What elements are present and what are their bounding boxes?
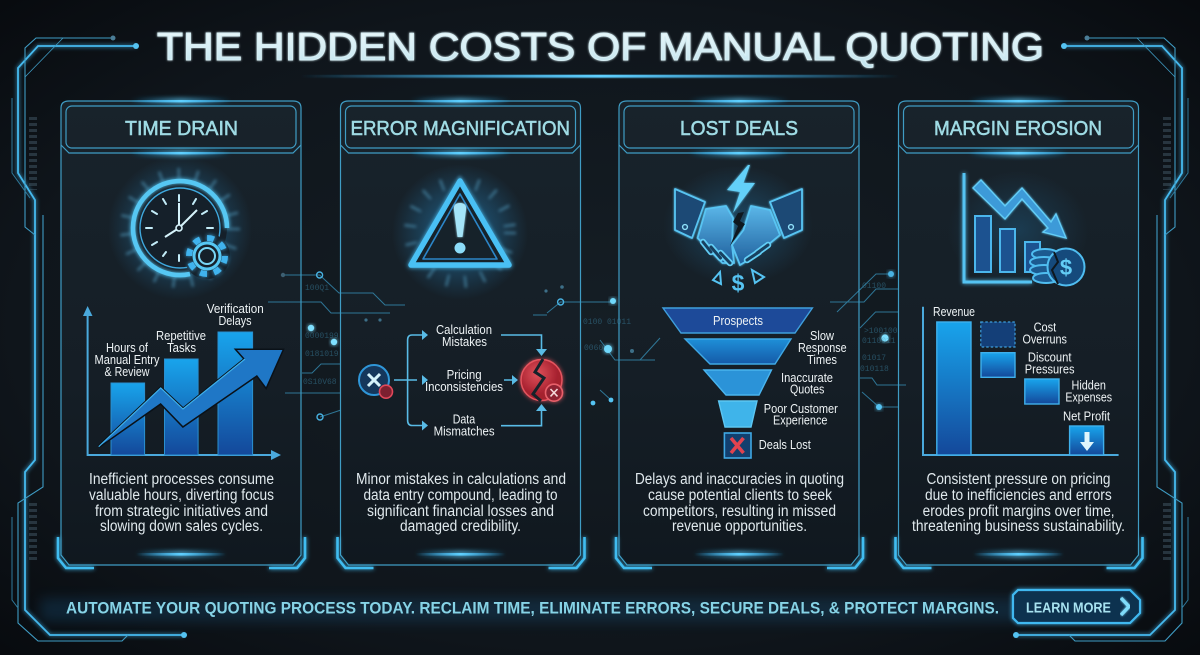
icon: warning triangle [392,164,528,300]
chart labels: Net Profit [1063,409,1110,423]
description [635,471,844,535]
bar chart: rising time cost [83,302,282,460]
description: threatening business sustainability. [912,518,1125,535]
flow labels: Calculation [436,323,492,337]
icon: clock with gear [108,156,252,300]
panel: error magnification [338,100,584,568]
flow labels: Mistakes [442,335,487,349]
funnel labels [713,314,847,452]
panel frame [896,100,1142,568]
circuit connectors: lost deals to margin erosion: 01100 [862,282,886,291]
circuit connectors: time drain to error magnification: 100Q1 [305,284,329,293]
chart labels: Expenses [1065,390,1112,404]
panel: time drain [58,100,305,568]
broken red result icon [521,359,562,401]
icon: broken handshake [663,165,813,296]
heading: MARGIN EROSION [934,118,1102,140]
description: competitors, resulting in missed [643,503,836,520]
funnel labels: Experience [773,414,828,428]
branching arrows [394,330,547,430]
description: Inefficient processes consume [89,471,274,488]
panel frame [338,100,584,568]
funnel labels: Times [807,353,837,367]
description: significant financial losses and [367,503,554,520]
description: damaged credibility. [400,518,521,535]
circuit connectors: lost deals to margin erosion: 0110011 [862,337,896,346]
description: due to inefficiencies and errors [925,487,1112,504]
circuit connectors: error magnification to lost deals [533,285,660,405]
frame: left circuit border [12,36,187,641]
button: learn more: LEARN MORE [1026,600,1111,616]
button: learn more [1013,590,1140,623]
circuit connectors: lost deals to margin erosion [830,271,906,410]
panel frame [58,100,305,568]
frame: right circuit border [1013,36,1188,641]
description: cause potential clients to seek [648,487,832,504]
description [89,471,274,535]
panel: lost deals [616,100,863,568]
chart labels: Revenue [933,305,975,319]
chart labels: & Review [104,365,150,379]
chart labels: Cost [1034,321,1057,335]
waterfall chart: revenue to net profit [923,305,1119,455]
chart labels: Hidden [1072,379,1106,393]
icon: falling chart with coins [948,170,1088,290]
icon: falling chart with coins: $ [1060,255,1072,280]
circuit connectors: time drain to error magnification: 0000199 [305,332,339,341]
chart labels: Delays [218,314,252,328]
circuit connectors: lost deals to margin erosion: 010118 [860,365,889,374]
icon: chevron [1121,598,1129,615]
chart labels [94,302,264,379]
description: slowing down sales cycles. [100,518,263,535]
bottom band glow [40,598,1020,622]
circuit connectors: error magnification to lost deals: 0060 [584,344,603,353]
chart labels: Manual Entry [94,353,160,367]
call to action text: AUTOMATE YOUR QUOTING PROCESS TODAY. RECLAIM TIME, ELIMINATE ERRORS, SECURE DEALS, & PROTECT MARGINS. [66,598,999,618]
circuit connectors: time drain to error magnification [268,272,405,420]
chart labels: Verification [207,302,264,316]
description: Delays and inaccuracies in quoting [635,471,844,488]
chart labels: Tasks [167,341,196,355]
description: data entry compound, leading to [364,487,558,504]
funnel [663,308,847,458]
description: Minor mistakes in calculations and [356,471,566,488]
funnel labels: Inaccurate [781,371,833,385]
funnel labels: Quotes [790,383,824,397]
flow labels: Mismatches [434,425,495,439]
funnel labels: Prospects [713,314,763,328]
chart labels: Overruns [1022,332,1067,346]
funnel labels: Slow [810,329,835,343]
description [912,471,1125,535]
panel frame [616,100,863,568]
description: revenue opportunities. [672,518,807,535]
source error icon [359,365,392,398]
flow labels: Pricing [447,368,482,382]
chart labels: Pressures [1025,362,1074,376]
circuit connectors: lost deals to margin erosion: >100100 [864,327,898,336]
flow diagram: error propagation [359,323,562,439]
description: from strategic initiatives and [95,503,268,520]
icon: broken handshake: $ [732,270,745,296]
description: Consistent pressure on pricing [926,471,1110,488]
heading: ERROR MAGNIFICATION [350,118,570,140]
chart labels: Repetitive [156,329,206,343]
heading: LOST DEALS [680,118,798,140]
chart labels: Discount [1028,350,1072,364]
chart labels [933,305,1112,423]
description: valuable hours, diverting focus [89,487,274,504]
circuit connectors: time drain to error magnification: 0181019 [305,350,339,359]
funnel labels: Deals Lost [759,438,811,452]
circuit connectors: time drain to error magnification: 0S10V68 [303,378,337,387]
circuit connectors: error magnification to lost deals: 0100 01011 [583,318,631,327]
title: THE HIDDEN COSTS OF MANUAL QUOTING [157,26,1044,69]
title underline glow [300,75,900,78]
chart labels: Hours of [106,341,148,355]
flow labels: Inconsistencies [425,380,503,394]
circuit connectors: lost deals to margin erosion: 01017 [862,354,886,363]
panel: margin erosion [896,100,1142,568]
funnel labels: Response [798,341,847,355]
description: erodes profit margins over time, [923,503,1115,520]
handshake fingers [703,242,768,263]
heading: TIME DRAIN [125,118,238,140]
flow labels: Data [453,413,475,427]
description [356,471,566,535]
funnel labels: Poor Customer [764,402,838,416]
flow labels [425,323,503,439]
